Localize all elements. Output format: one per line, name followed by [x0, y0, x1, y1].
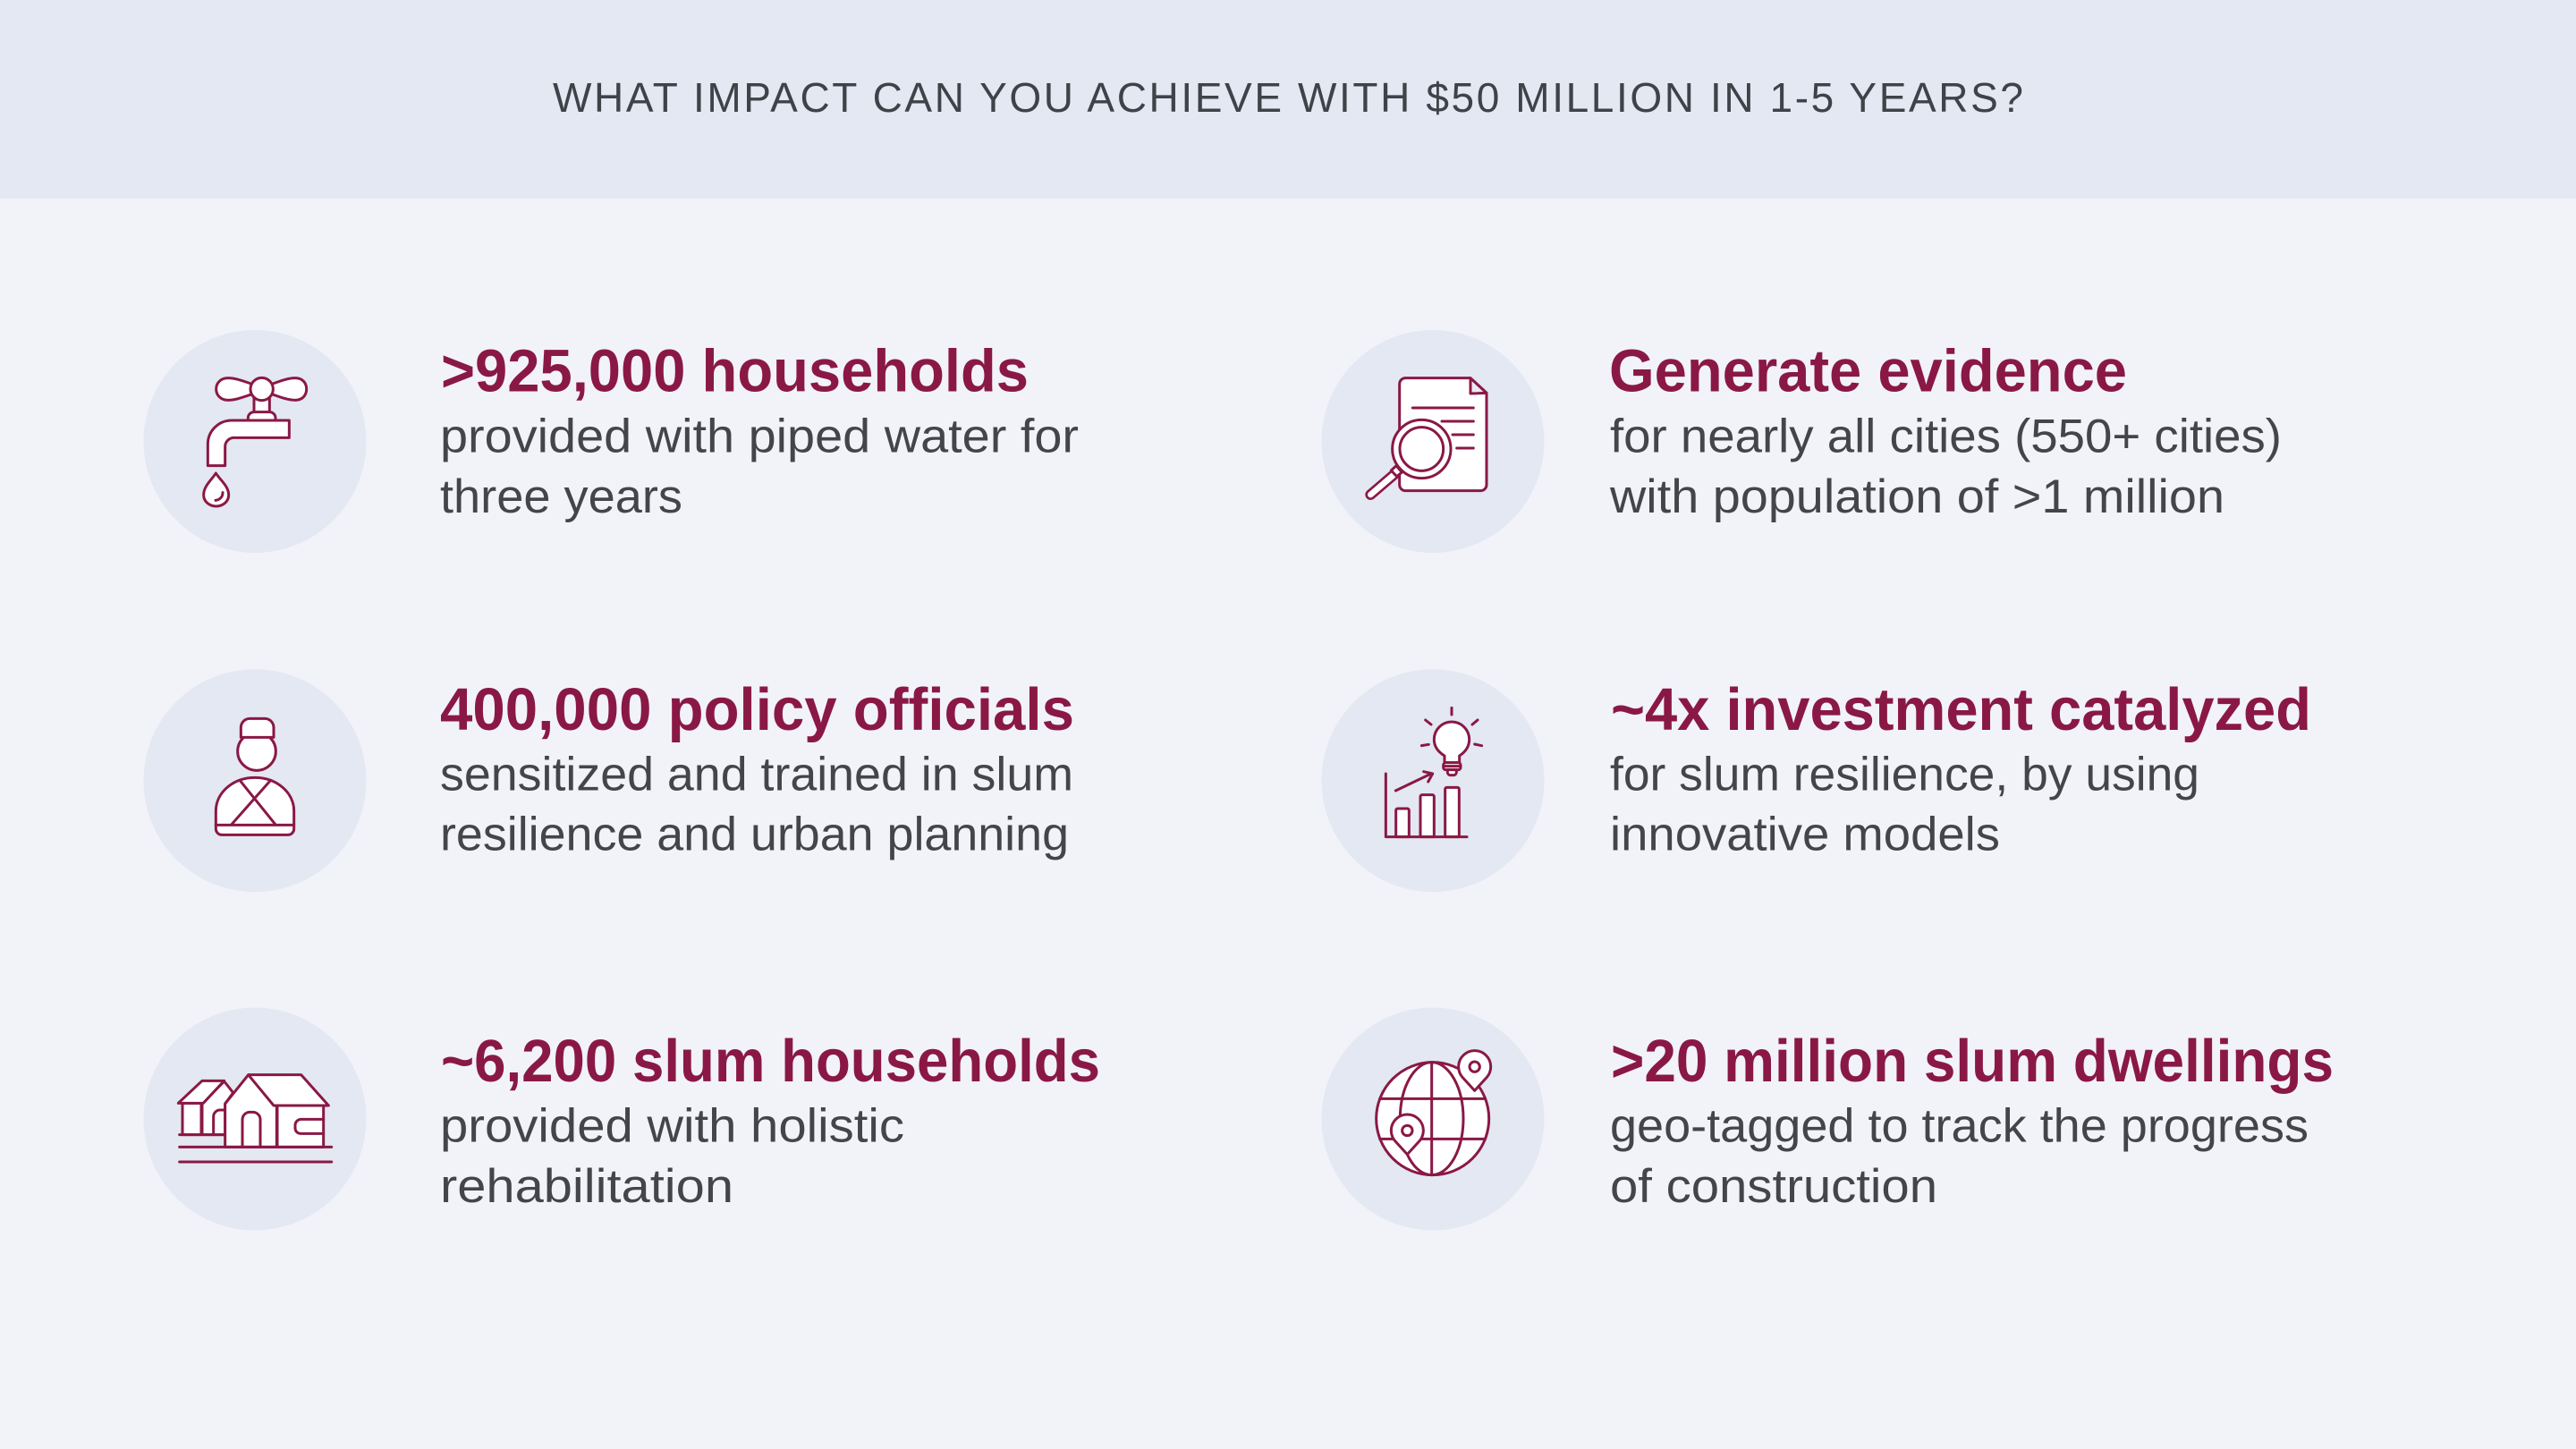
- description: provided with piped water for: [440, 410, 1079, 463]
- description: of construction: [1610, 1160, 1937, 1213]
- item: piped water: [143, 330, 1079, 553]
- heading: 400,000 policy officials: [440, 676, 1074, 743]
- item: slum dwellings: [1322, 1007, 2334, 1231]
- item: slum households: [143, 1007, 1100, 1231]
- description: provided with holistic: [440, 1100, 904, 1152]
- icon: water tap: [143, 330, 367, 553]
- description: [1609, 410, 2282, 523]
- title: WHAT IMPACT CAN YOU ACHIEVE WITH $50 MILLION IN 1-5 YEARS?: [553, 74, 2023, 121]
- description: geo-tagged to track the progress: [1610, 1100, 2309, 1152]
- icon: houses: [143, 1007, 367, 1231]
- description: resilience and urban planning: [440, 809, 1069, 861]
- description: for slum resilience, by using: [1610, 748, 2199, 801]
- heading: Generate evidence: [1609, 338, 2127, 405]
- description: [1610, 1100, 2309, 1213]
- description: three years: [440, 470, 682, 523]
- description: rehabilitation: [440, 1160, 733, 1213]
- description: sensitized and trained in slum: [440, 748, 1073, 801]
- item: policy officials: [143, 669, 1074, 892]
- heading: ~4x investment catalyzed: [1611, 676, 2311, 743]
- description: with population of >1 million: [1609, 470, 2224, 523]
- item: evidence: [1322, 330, 2282, 553]
- description: for nearly all cities (550+ cities): [1610, 410, 2282, 463]
- description: [1610, 748, 2199, 861]
- heading: >20 million slum dwellings: [1611, 1028, 2334, 1095]
- item: investment catalyzed: [1322, 669, 2311, 892]
- heading: >925,000 households: [441, 338, 1029, 405]
- icon: bulb and bar chart: [1322, 669, 1544, 892]
- description: [440, 410, 1079, 523]
- description: [440, 1100, 904, 1213]
- description: innovative models: [1610, 809, 2000, 861]
- icon: official: [143, 669, 367, 892]
- description: [440, 748, 1073, 861]
- icon: globe with location pins: [1322, 1007, 1544, 1231]
- header band: [0, 0, 2576, 199]
- heading: ~6,200 slum households: [441, 1028, 1100, 1095]
- icon: document with magnifier: [1322, 330, 1544, 553]
